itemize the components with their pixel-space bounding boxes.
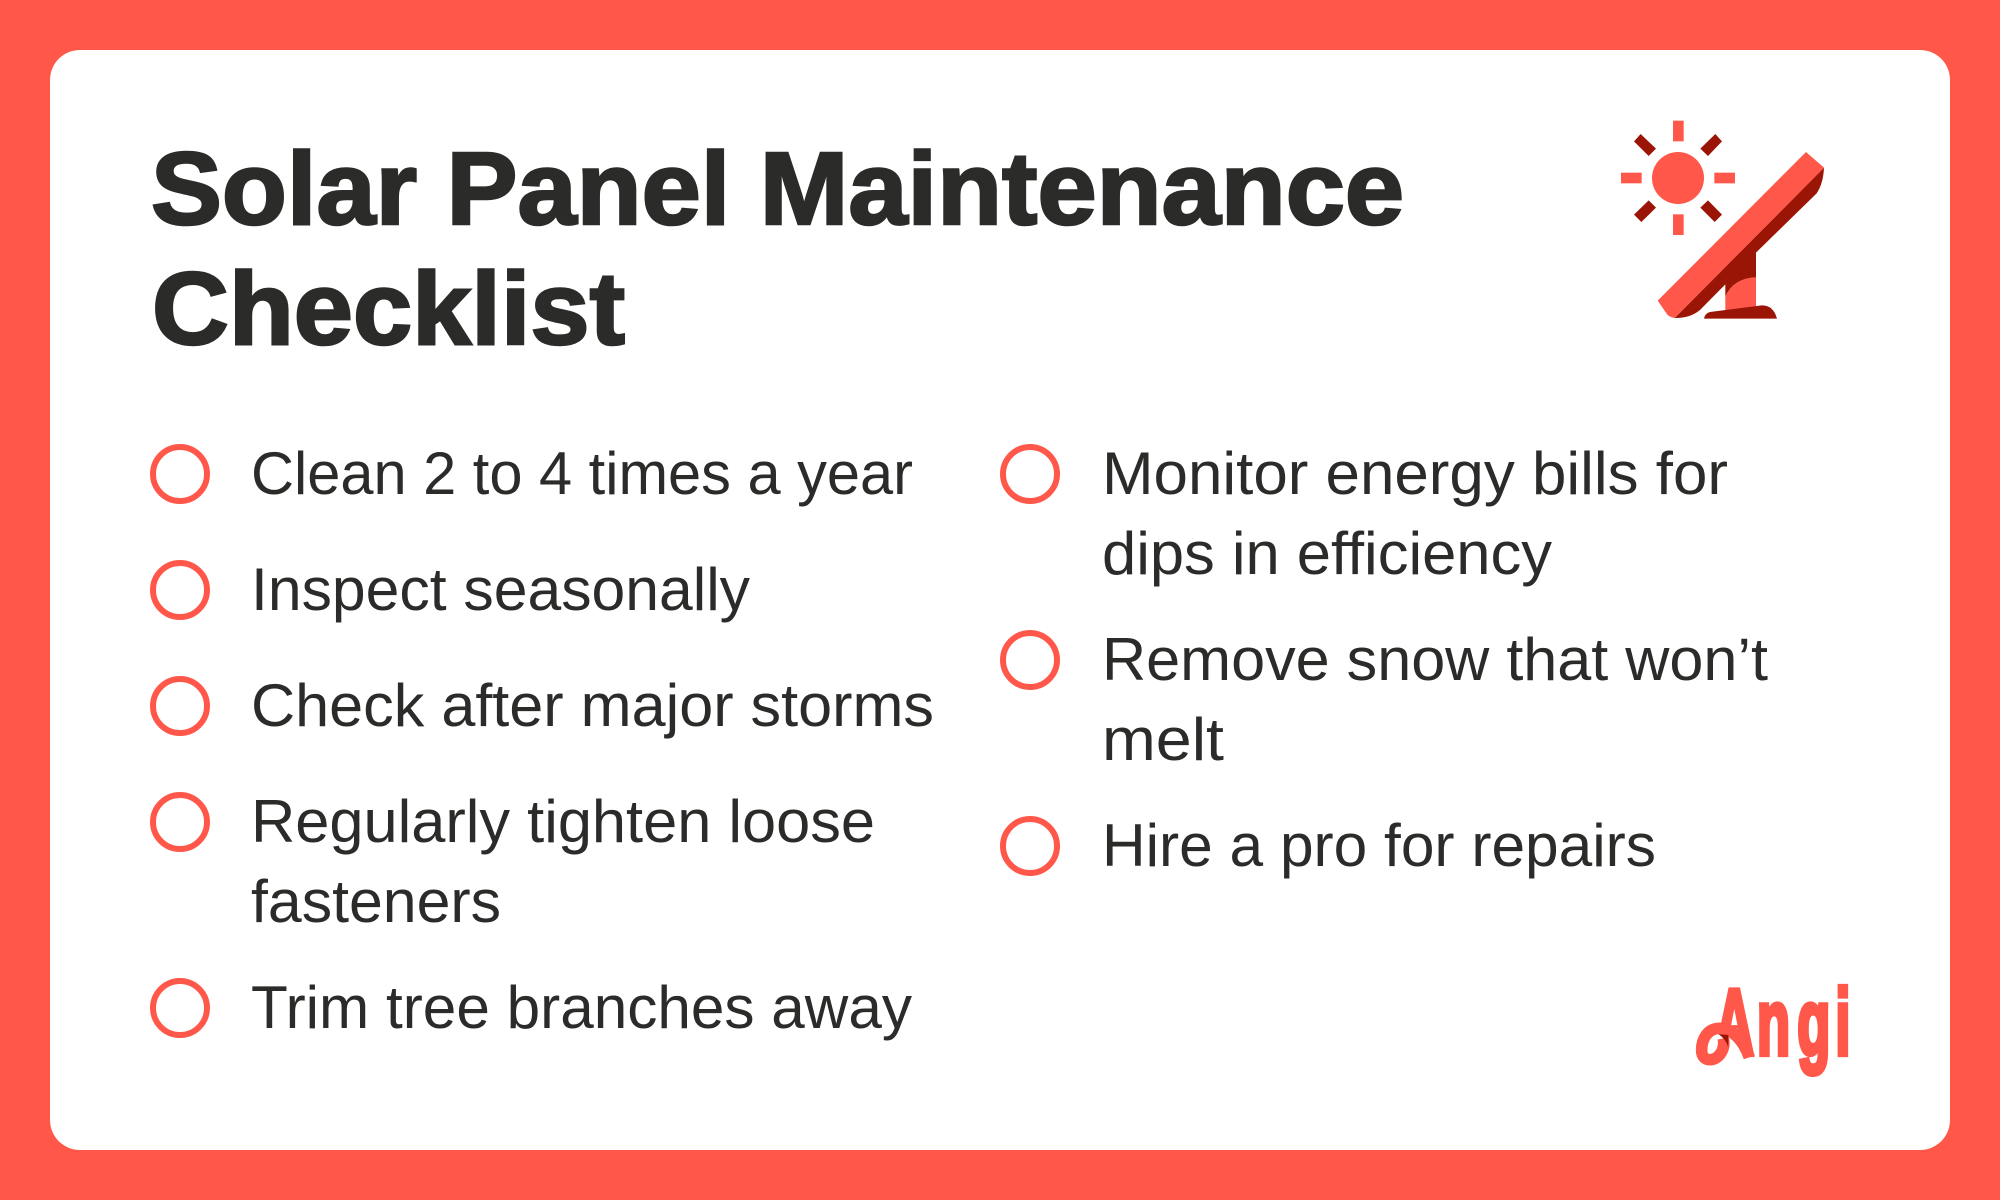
item: monitor: dips in efficiency — [1102, 520, 1552, 587]
item: snow: Remove snow that won’t — [1102, 626, 1768, 693]
item: trim: Trim tree branches away — [251, 974, 912, 1041]
item: inspect: Inspect seasonally — [251, 556, 750, 623]
title: Solar Panel Maintenance — [151, 131, 1404, 246]
checklist: left column — [153, 440, 934, 1041]
item: storms: Check after major storms — [251, 672, 934, 739]
item: fasteners: Regularly tighten loose — [251, 788, 875, 855]
title — [151, 131, 1404, 366]
item: hire: Hire a pro for repairs — [1102, 812, 1656, 879]
logo: Angi: Angi — [1715, 971, 1850, 1075]
item: monitor — [1003, 440, 1728, 587]
item: fasteners: fasteners — [251, 868, 501, 935]
item: snow — [1003, 626, 1768, 773]
checklist: right column — [1003, 440, 1768, 879]
item: fasteners — [153, 788, 875, 935]
icon: solar panel — [1658, 152, 1824, 319]
icon: sun and solar panel — [1621, 121, 1824, 319]
icon: sun — [1621, 121, 1735, 235]
item: snow: melt — [1102, 706, 1224, 773]
item: clean: Clean 2 to 4 times a year — [251, 440, 913, 507]
item: monitor: Monitor energy bills for — [1102, 440, 1728, 507]
title: Checklist — [152, 251, 625, 366]
